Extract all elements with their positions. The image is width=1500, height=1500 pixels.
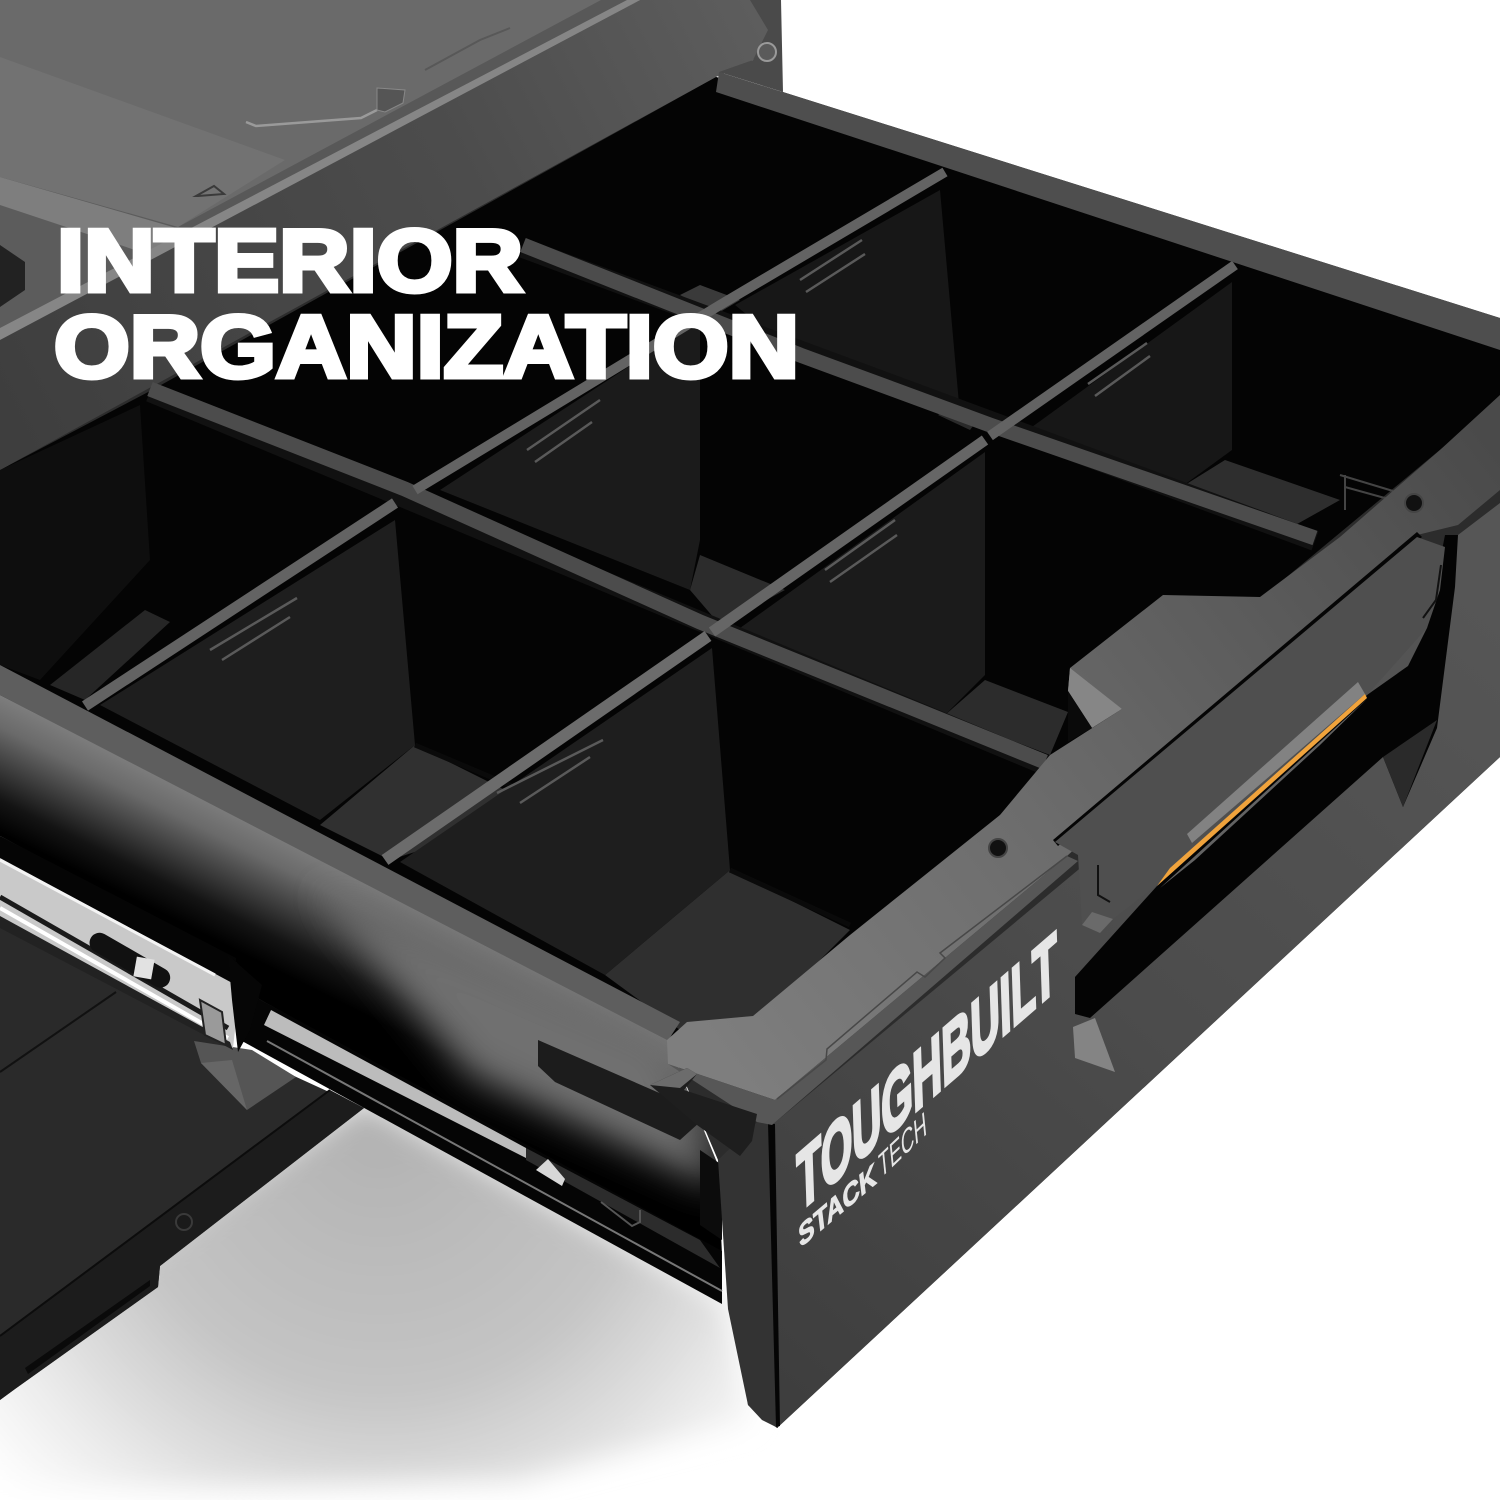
raised label plate	[1187, 682, 1365, 843]
title: INTERIOR	[57, 211, 523, 310]
right side rim	[716, 72, 1500, 350]
wire clip	[246, 110, 377, 126]
hexagonal recess	[0, 245, 25, 307]
upper cabinet top	[0, 0, 783, 470]
lower chamfer	[1073, 1018, 1115, 1072]
screw	[989, 839, 1007, 857]
glint triangle	[536, 1159, 565, 1186]
orange accent strip	[1157, 694, 1367, 886]
drawer side wall	[0, 695, 722, 1255]
divider faces	[1025, 282, 1232, 488]
handle	[1055, 537, 1445, 933]
handle recess	[1073, 535, 1458, 1072]
outer rail	[0, 836, 240, 1048]
logo: TOUGHBUILT STACKTECH	[796, 914, 1059, 1255]
drawer front face	[718, 503, 1500, 1428]
slide rail	[0, 836, 722, 1304]
logo: TOUGHBUILT STACKTECH: STACK	[797, 1157, 878, 1255]
latch	[650, 1068, 757, 1156]
cabinet lip	[0, 0, 781, 470]
divider top edges	[85, 172, 1315, 860]
right wall bracket	[1340, 475, 1393, 510]
rail clip	[200, 1000, 226, 1045]
drawer interior	[0, 77, 1500, 1040]
rail end block	[228, 955, 262, 1052]
title: ORGANIZATION	[54, 297, 799, 396]
front end cap	[718, 1122, 778, 1428]
compartment floors	[1180, 460, 1340, 528]
screw	[758, 43, 776, 61]
lower cabinet	[0, 925, 364, 1400]
logo: TOUGHBUILT STACKTECH: TOUGHBUILT	[796, 914, 1059, 1231]
floor shadow	[0, 1100, 750, 1488]
icon: step triangle mark	[196, 186, 224, 196]
black slot	[1053, 532, 1422, 846]
near side rim	[0, 665, 680, 1042]
rail slot	[86, 929, 174, 991]
front top rim	[667, 395, 1500, 1125]
logo: TOUGHBUILT STACKTECH: TECH	[877, 1103, 928, 1186]
divider slot marks	[210, 240, 1150, 803]
screw	[1405, 494, 1423, 512]
floor ridges	[730, 870, 850, 925]
title	[54, 211, 799, 396]
